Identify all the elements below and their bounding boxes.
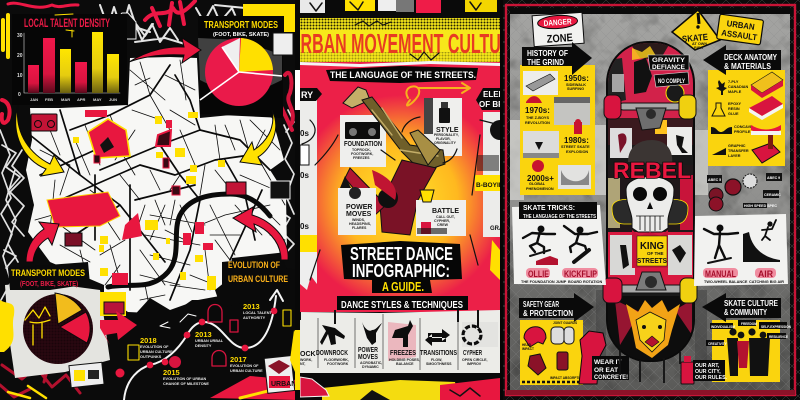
wheel: bottom right: [680, 278, 697, 303]
milestone 1970s: 1970s:: [525, 106, 550, 115]
heading: SKATE TRICKS:: [523, 203, 575, 212]
white panel: skate tricks right: [694, 214, 788, 286]
heading: THE LANGUAGE OF THE STREETS: [523, 214, 596, 220]
heading: [519, 202, 597, 220]
top truck and wheels: [604, 95, 696, 130]
icon: boombox: [345, 122, 380, 139]
safety heading arrow: SAFETY GEAR: [523, 300, 559, 309]
bar chart: local talent density: MAY: [93, 97, 102, 102]
divider strip right: [500, 0, 504, 400]
bar chart: local talent density: [12, 14, 127, 105]
card: power moves: POWER: [346, 204, 372, 211]
boombox sticker: [100, 292, 126, 316]
milestone 2018: OUTPUNKS: [140, 355, 162, 359]
card: battle: CREW: [437, 223, 449, 227]
card: style: ORIGINALITY: [434, 141, 457, 145]
milestone 1980s: [561, 136, 590, 154]
style: transitions: TRANSITIONS: [420, 348, 457, 357]
icon: spray can: [439, 102, 450, 123]
sign: danger zone: [532, 12, 584, 47]
bar chart: local talent density: APR: [77, 97, 86, 102]
lion illustration: [626, 300, 680, 358]
milestone 2013 upper: 2013: [243, 302, 260, 311]
panel: dance styles strip: [300, 310, 500, 376]
elements side panel: B-BOYIN: [476, 182, 504, 189]
community tags: SELF-EXPRESSION: [761, 325, 792, 329]
deck lower graphic: [608, 232, 693, 287]
icon: red sneaker: [300, 377, 329, 397]
style: power moves: ACROBATIC,: [360, 361, 382, 365]
milestone 1970s: THE Z-BOYS: [526, 116, 549, 120]
divider strip: [295, 0, 301, 400]
community tags: [706, 320, 792, 346]
community tags: INDIVIDUALISM: [711, 325, 735, 329]
yellow panel: skate culture: [702, 293, 792, 382]
history heading arrow: [522, 42, 592, 75]
milestone 2017: 2017: [230, 355, 247, 364]
label: kickflip: BOARD ROTATION: [568, 280, 602, 284]
red fist and slogan: WEAR IT: [594, 359, 621, 366]
item: graphic transfer: TRANSFER: [728, 149, 749, 153]
arrow: yellow right: [240, 110, 276, 165]
red fist and slogan: CONCRETE!: [594, 375, 628, 381]
milestone 2015: EVOLUTION OF URBAN: [163, 377, 206, 381]
text: gravity defiance: [648, 55, 689, 87]
style: power moves: [358, 322, 382, 369]
deck heading arrow: [703, 45, 781, 75]
top collage strip: [300, 0, 497, 13]
culture heading arrow: SKATE CULTURE: [724, 299, 779, 308]
style: downrock: FOOTWORK: [327, 362, 349, 366]
deck skull cap: [628, 140, 672, 165]
timeline: evolution of urban culture: [116, 262, 296, 400]
milestone 2017: EVOLUTION OF: [230, 364, 259, 368]
drips bottom: [620, 350, 680, 383]
style: cypher: [462, 326, 488, 366]
label: manual: TWO-WHEEL BALANCE: [704, 280, 748, 284]
sticker: urban: URBAN: [271, 381, 296, 388]
style: downrock: DOWNROCK: [316, 348, 348, 357]
spray can and slogan: [681, 356, 728, 384]
graffiti wall background: [0, 1, 294, 398]
photo: vintage board: [523, 71, 558, 95]
card: power moves: MOVES: [346, 211, 372, 218]
style: freezes: [389, 320, 420, 366]
parts: bearings and specs: [707, 173, 782, 211]
parts: bearings and specs: CERAMIC: [764, 193, 781, 197]
elements side panel: [475, 88, 500, 280]
bottom truck and wheels: [603, 272, 697, 303]
pie chart: transport modes: (FOOT, BIKE, SKATE): [213, 32, 269, 38]
deck heading arrow: & MATERIALS: [724, 62, 772, 71]
main title: [341, 241, 462, 294]
milestone 2017: [230, 355, 263, 373]
style: transitions: SMOOTHNESS: [426, 362, 452, 366]
milestone 2015: CHANGE OF MILESTONE: [163, 382, 209, 386]
parts: bearings and specs: ABEC 5: [708, 178, 721, 182]
milestone 2013: [195, 330, 224, 348]
bar chart: local talent density: 0: [18, 92, 21, 98]
card: power moves: HEADSPINS,: [349, 222, 371, 226]
text: gravity defiance: GRAVITY: [652, 57, 686, 64]
milestone 1980s: EXPLOSION: [566, 150, 588, 154]
history heading arrow: HISTORY OF: [527, 49, 568, 58]
style: toprock fragment: OCK: [300, 351, 316, 358]
style: toprock fragment: [300, 351, 316, 366]
milestone 2018: 2018: [140, 336, 157, 345]
sticker: urban: [264, 356, 296, 393]
red fist and slogan: [579, 331, 629, 384]
card: battle: BATTLE: [432, 208, 459, 215]
card: foundation: TOPROCK,: [352, 148, 371, 152]
white panel: skate tricks left: [512, 202, 606, 285]
label: ollie: THE FOUNDATION JUMP: [521, 280, 567, 284]
yellow panel: deck anatomy and materials: [703, 45, 785, 166]
label: ollie: [521, 268, 567, 284]
wheel: bottom left: [603, 278, 622, 303]
label: air: [749, 268, 784, 284]
card: style: FLAVOR,: [436, 137, 451, 141]
style: power moves: DYNAMIC: [362, 365, 379, 369]
history side panel: 0s: [300, 222, 309, 231]
style: freezes: FREEZES: [390, 348, 416, 357]
yellow panel: safety gear: JOINT GUARDS: [553, 321, 577, 325]
sign: danger zone: DANGER: [543, 17, 572, 28]
skateboard deck: [606, 41, 695, 362]
card: foundation: FOUNDATION: [344, 141, 382, 148]
city map base: [26, 57, 287, 314]
card: style: PERSONALITY,: [434, 133, 459, 137]
history heading arrow: THE GRIND: [527, 58, 564, 67]
rebel text: REBEL: [613, 158, 691, 183]
card: foundation: [340, 115, 386, 167]
group of skaters: [727, 328, 770, 376]
style: toprock fragment: WORK,: [300, 358, 312, 362]
pie chart: torn paper: [5, 282, 110, 378]
label: manual: [703, 268, 748, 284]
bar chart: local talent density: FEB: [45, 97, 53, 102]
skater: ollie: [523, 226, 558, 265]
item: 7-ply maple: MAPLE: [728, 90, 742, 94]
milestone 2017: URBAN CULTURE: [230, 369, 263, 373]
deck heading arrow: DECK ANATOMY: [724, 53, 778, 62]
item: epoxy glue: RESIN: [728, 107, 740, 111]
culture heading arrow: [702, 293, 781, 322]
label: ollie: OLLIE: [528, 269, 549, 280]
milestone 1950s: SIDEWALK: [566, 83, 586, 87]
card: foundation: FREEZES: [353, 156, 370, 160]
yellow panel: safety gear: IMPACT: [522, 347, 534, 351]
history side panel: 0s: [300, 129, 309, 138]
main title: INFOGRAPHIC:: [352, 261, 450, 281]
milestone 1950s: [564, 74, 589, 91]
card: power moves: [338, 187, 376, 235]
badge: king of the streets: KING: [640, 241, 664, 252]
card: style: [424, 98, 462, 156]
photo: pool: [554, 97, 590, 125]
milestone 2013: URBAN URBAL: [195, 339, 224, 343]
bar chart: local talent density: MAR: [61, 97, 70, 102]
ramp: [743, 232, 780, 262]
spray can and slogan: OUR ART,: [695, 363, 720, 369]
red fist and slogan: OR EAT: [594, 367, 618, 374]
yellow marker scribble: [406, 83, 470, 106]
icon: hydrant: [574, 119, 582, 134]
main title: STREET DANCE: [350, 244, 453, 264]
label: transport modes: (FOOT, BIKE, SKATE): [20, 281, 78, 288]
sign: skate: SKATE: [682, 32, 708, 44]
milestone 2018: URBAN CULTURE: [140, 350, 173, 354]
pie title: TRANSPORT MODES: [204, 19, 278, 31]
milestone 1970s: [525, 96, 550, 125]
text: gravity defiance: DEFIANCE: [652, 64, 686, 71]
community tags: RESILIENCE: [769, 335, 788, 339]
milestone 2000s: [526, 160, 554, 191]
deck top graphic: [608, 43, 693, 158]
milestone 2000s: 2000s+: [527, 174, 554, 183]
card: foundation: FOOTWORK,: [351, 152, 373, 156]
card: battle: [416, 190, 466, 236]
item: graphic transfer: LAYER: [728, 154, 741, 158]
elements side panel: OF BR: [479, 100, 504, 109]
milestone 1980s: 1980s:: [564, 136, 589, 145]
style: downrock: [316, 325, 349, 366]
icon: wrist guard: [557, 352, 568, 370]
arrow: red chart to pie: [129, 38, 201, 63]
item: 7-ply maple: CANADIAN: [728, 85, 749, 89]
milestone 2013 upper: LOCAL TALENT: [243, 311, 272, 315]
sign: danger zone: ZONE: [546, 32, 573, 46]
icon: knee pads: [551, 327, 574, 344]
river: [108, 194, 270, 287]
bar chart: local talent density: 20: [17, 53, 23, 59]
item: concave: PROFILE: [734, 130, 751, 134]
sign: skate: [672, 10, 720, 50]
milestone 2013: DENSITY: [195, 344, 212, 348]
card: battle: CALL OUT,: [436, 215, 455, 219]
style: transitions: [420, 329, 457, 366]
skater: air: [762, 220, 776, 240]
parts: bearings and specs: HIGH SPEED SPEC: [744, 204, 777, 208]
yellow map blocks: [73, 112, 225, 290]
badge: king of the streets: [632, 230, 668, 268]
history side panel: RY: [301, 90, 313, 100]
icon: elbow pad: [528, 354, 546, 375]
arrow: red lower right: [233, 207, 288, 260]
style: freezes: HOLDING POSES,: [389, 358, 420, 362]
yellow panel: safety gear: HEAD: [522, 343, 532, 347]
yellow panel: safety gear: [519, 293, 594, 385]
culture heading arrow: & COMMUNITY: [724, 308, 767, 317]
panel: urban map infographic: [0, 0, 297, 400]
subtitle: THE LANGUAGE OF THE STREETS.: [330, 70, 476, 81]
bar chart: local talent density: 30: [17, 33, 23, 39]
milestone 2015: 2015: [163, 368, 180, 377]
headphones: [612, 199, 688, 224]
label: evolution of urban culture: URBAN CULTURE: [228, 274, 288, 284]
bottom collage: [300, 373, 500, 400]
wheel: top left: [604, 95, 621, 119]
badge: king of the streets: OF THE: [647, 251, 664, 256]
community tags: CREATIVITY: [708, 342, 728, 346]
card: power moves: FLARES: [352, 226, 367, 230]
label: air: CATCHING BIG AIR: [749, 280, 784, 284]
milestone 1980s: STREET SKATE: [561, 145, 590, 149]
sign: skate: AT OWN: [692, 42, 707, 46]
card: style: STYLE: [436, 127, 459, 134]
arrow: red lower left: [26, 222, 59, 262]
arrows around dancer: [302, 117, 496, 280]
milestone 2018: [140, 336, 173, 359]
panel: street dance infographic: [300, 0, 500, 400]
style: transitions: FLOW,: [431, 358, 442, 362]
item: 7-ply maple: 7-PLY: [728, 80, 739, 84]
yellow panel: history of the grind: [520, 42, 595, 195]
style: cypher: OPEN CIRCLE,: [462, 358, 488, 362]
map boombox and jacket icons: [31, 13, 290, 246]
pie chart: transport modes: [198, 4, 296, 118]
safety heading arrow: [519, 293, 594, 322]
skull illustration: [612, 176, 688, 232]
deck middle background: [608, 165, 693, 235]
milestone 2000s: PHENOMENON: [526, 187, 554, 191]
sticker: hoodie: [69, 362, 104, 388]
style: power moves: POWER: [358, 345, 378, 354]
highlighted red districts: [47, 110, 213, 285]
main title: A GUIDE.: [382, 279, 424, 294]
wheel: top right: [679, 95, 696, 119]
elements side panel: GRA: [490, 226, 504, 232]
milestone 2018: EVOLUTION OF: [140, 345, 169, 349]
style: freezes: BALANCE: [396, 362, 414, 366]
text: gravity defiance: NO COMPLY: [658, 78, 685, 85]
card: power moves: WINDS,: [352, 218, 365, 222]
label: kickflip: [562, 268, 602, 284]
sub-heading: [337, 296, 468, 311]
milestone 2000s: GLOBAL: [529, 182, 546, 186]
milestone 2015: [163, 368, 209, 386]
item: concave: [711, 125, 781, 135]
subtitle: [326, 66, 478, 83]
arrow: yellow left: [16, 105, 64, 176]
skater: kickflip: [564, 226, 597, 262]
label: evolution of urban culture: EVOLUTION OF: [228, 260, 280, 270]
pink background and yellow glow: [300, 62, 500, 312]
parts: bearings and specs: ABEC 9: [767, 176, 780, 180]
panel: skateboard infographic: [503, 0, 800, 400]
chart title: LOCAL TALENT DENSITY: [24, 16, 110, 30]
milestone 1950s: SURFING: [567, 87, 584, 91]
icon: helmet: [524, 327, 546, 347]
elements side panel: ELEM: [483, 90, 506, 99]
dancer torso: [380, 160, 436, 235]
dancer shoe: [343, 87, 370, 108]
title banner: URBAN MOVEMENT CULTURE: [289, 28, 523, 59]
bar chart: local talent density: JAN: [30, 97, 38, 102]
map roads: [30, 60, 285, 310]
dancer leg: [362, 97, 445, 172]
label: evolution of urban culture: [222, 257, 291, 288]
style: toprock fragment: NT,: [300, 362, 306, 366]
photo: halfpipe: [558, 165, 591, 189]
sign: urban assault: [717, 14, 764, 45]
community tags: FREEDOM: [741, 322, 757, 326]
photo: skater: [523, 131, 559, 158]
history side panel: [300, 88, 322, 290]
history side panel: 0s: [300, 171, 309, 180]
milestone 1970s: REVOLUTION: [525, 121, 550, 125]
item: graphic transfer: GRAPHIC: [728, 144, 746, 148]
item: graphic transfer: [712, 135, 780, 163]
label: air: AIR: [758, 269, 773, 280]
milestone 2013 upper: AUTHORITY: [243, 316, 266, 320]
skater: manual: [704, 224, 738, 263]
item: concave: CONCAVE: [734, 125, 753, 129]
dancer illustration: [340, 87, 445, 235]
title banner: [300, 18, 500, 67]
bar chart: local talent density: JUN: [109, 97, 117, 102]
style: cypher: IMPROV: [467, 362, 482, 366]
badge: king of the streets: STREETS: [637, 256, 667, 265]
sub-heading: DANCE STYLES & TECHNIQUES: [341, 300, 463, 311]
bar chart: local talent density: 10: [17, 73, 23, 79]
safety heading arrow: & PROTECTION: [523, 309, 573, 318]
arrow: red center: [100, 311, 137, 345]
yellow panel: safety gear: IMPACT ABSORPTION: [550, 376, 585, 380]
spray can and slogan: OUR RULES.: [695, 375, 728, 381]
spray can and slogan: OUR CITY,: [695, 369, 721, 375]
card: battle: CYPHER,: [434, 219, 450, 223]
style: downrock: FLOORWORK,: [324, 358, 349, 362]
item: epoxy glue: EPOXY: [728, 102, 742, 106]
sign: urban assault: URBAN: [726, 18, 755, 32]
label: kickflip: KICKFLIP: [564, 269, 597, 280]
milestone 2013: 2013: [195, 330, 212, 339]
style: cypher: CYPHER: [463, 348, 482, 357]
item: epoxy glue: GLUE: [728, 112, 739, 116]
milestone 1950s: 1950s:: [564, 74, 589, 83]
label: transport modes: TRANSPORT MODES: [11, 268, 85, 279]
label: transport modes: [8, 262, 90, 290]
style: power moves: MOVES: [358, 352, 378, 361]
item: 7-ply maple: [716, 72, 783, 98]
milestone 2013 upper: [243, 302, 272, 320]
item: epoxy glue: [712, 96, 783, 120]
sign: skate: RISK: [694, 46, 703, 50]
sign: urban assault: ASSAULT: [721, 27, 759, 43]
label: manual: MANUAL: [705, 269, 736, 280]
